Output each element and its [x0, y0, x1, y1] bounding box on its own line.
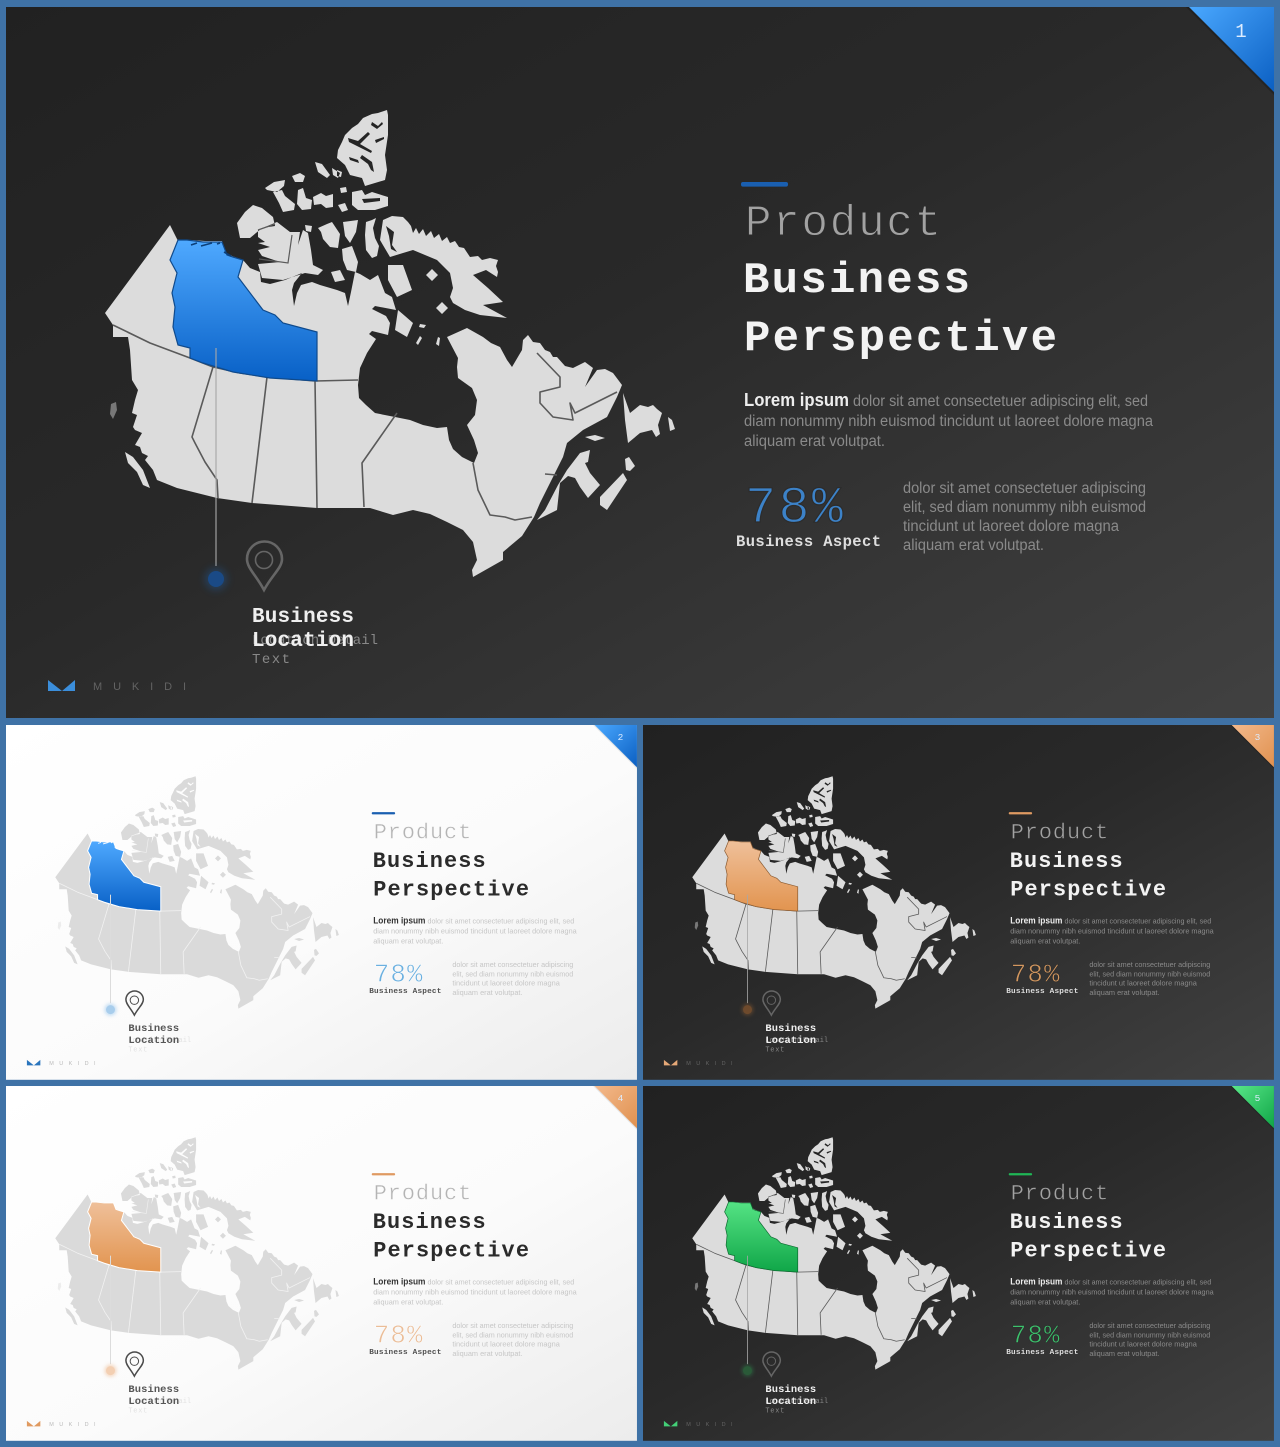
corner ribbon with number 4	[593, 1086, 637, 1130]
pin label: location detail text: Business	[252, 606, 354, 629]
stat description: tincidunt ut laoreet dolore magna	[1089, 979, 1198, 988]
stat description	[1089, 1321, 1210, 1358]
pin label: location detail text: Text	[252, 652, 290, 668]
icon: map pin	[126, 1352, 143, 1376]
stat: 78 percent: 78%	[1011, 959, 1060, 989]
stat description: elit, sed diam nonummy nibh euismod	[1089, 1330, 1210, 1339]
map of Canada	[105, 110, 675, 577]
stat: 78 percent	[1006, 959, 1078, 996]
intro paragraph: dolor sit amet consectetuer adipiscing elit, sed	[853, 393, 1148, 410]
intro paragraph: aliquam erat volutpat.	[373, 1297, 443, 1306]
heading: Business	[1010, 1210, 1123, 1235]
stat: 78 percent: Business Aspect	[1006, 1349, 1078, 1357]
stat description: dolor sit amet consectetuer adipiscing	[452, 960, 573, 969]
corner ribbon with number 5	[1230, 1086, 1274, 1130]
logo	[664, 1060, 733, 1067]
accent bar	[1009, 812, 1032, 814]
heading	[373, 1181, 529, 1264]
highlighted region: Northwest Territories	[170, 240, 317, 381]
pin label: location detail text: Location	[765, 1035, 816, 1047]
stat: 78 percent: Business Aspect	[369, 1349, 441, 1357]
intro paragraph: aliquam erat volutpat.	[373, 936, 443, 945]
stat description: tincidunt ut laoreet dolore magna	[452, 979, 561, 988]
highlighted region: Northwest Territories	[88, 1202, 161, 1272]
stat description: dolor sit amet consectetuer adipiscing	[452, 1321, 573, 1330]
heading: Business	[373, 1210, 486, 1235]
logo: MUKIDI	[49, 1422, 96, 1428]
pin label: location detail text: Text	[128, 1407, 147, 1415]
intro paragraph: diam nonummy nibh euismod tincidunt ut laoreet dolore magna	[373, 1287, 577, 1296]
heading: Product	[745, 199, 941, 249]
heading: Perspective	[1010, 1239, 1166, 1264]
corner ribbon with number 4: 4	[618, 1093, 624, 1104]
stat description: aliquam erat volutpat.	[452, 988, 523, 997]
map of Canada	[55, 776, 339, 1009]
heading: Business	[373, 849, 486, 874]
stat: 78 percent: 78%	[374, 959, 423, 989]
corner ribbon with number 1: 1	[1235, 21, 1247, 43]
accent bar	[1009, 1173, 1032, 1175]
heading	[373, 820, 529, 903]
heading	[743, 199, 1057, 364]
slide background	[643, 725, 1274, 1080]
intro paragraph	[744, 390, 1153, 450]
intro paragraph	[1010, 916, 1214, 945]
accent bar	[372, 812, 395, 814]
stat description: elit, sed diam nonummy nibh euismod	[452, 1330, 573, 1339]
pin label: location detail text: Location	[128, 1035, 179, 1047]
intro paragraph: Lorem ipsum	[1010, 916, 1063, 926]
stat: 78 percent	[369, 959, 441, 996]
intro paragraph: Lorem ipsum	[373, 916, 426, 926]
map of Canada	[692, 1137, 976, 1370]
highlighted region: Northwest Territories	[725, 1202, 798, 1272]
location dot	[105, 1365, 116, 1377]
corner ribbon with number 3: 3	[1255, 732, 1261, 743]
pin label: location detail text: Location Detail	[128, 1398, 191, 1406]
pin label: location detail text	[765, 1023, 828, 1054]
stat description: tincidunt ut laoreet dolore magna	[452, 1340, 561, 1349]
intro paragraph: dolor sit amet consectetuer adipiscing elit, sed	[427, 917, 574, 926]
location dot	[105, 1004, 116, 1016]
intro paragraph: diam nonummy nibh euismod tincidunt ut laoreet dolore magna	[1010, 1287, 1214, 1296]
pin label: location detail text	[252, 606, 378, 668]
pin label: location detail text: Location Detail	[128, 1037, 191, 1045]
heading: Product	[374, 1181, 471, 1206]
stat: 78 percent: 78%	[1011, 1320, 1060, 1350]
pin label: location detail text	[128, 1023, 191, 1054]
location dot	[205, 568, 227, 590]
intro paragraph: Lorem ipsum	[373, 1277, 426, 1287]
panel: slide 1 dark blue	[6, 7, 1274, 718]
pin label: location detail text: Location	[252, 630, 354, 653]
location dot	[742, 1365, 753, 1377]
stat description: elit, sed diam nonummy nibh euismod	[1089, 969, 1210, 978]
slide background	[643, 1086, 1274, 1441]
heading: Perspective	[744, 314, 1057, 364]
pin label: location detail text: Business	[128, 1023, 179, 1035]
stat description: dolor sit amet consectetuer adipiscing	[903, 480, 1146, 497]
stat: 78 percent: Business Aspect	[736, 533, 881, 551]
panel: slide 2 light blue	[6, 725, 637, 1080]
corner ribbon with number 2	[593, 725, 637, 769]
pin connector line	[109, 1256, 111, 1364]
stat description: aliquam erat volutpat.	[452, 1349, 523, 1358]
intro paragraph: Lorem ipsum	[1010, 1277, 1063, 1287]
corner ribbon with number 3	[1230, 725, 1274, 769]
icon: map pin	[763, 991, 780, 1015]
highlighted region: Northwest Territories	[725, 841, 798, 911]
stat description: tincidunt ut laoreet dolore magna	[1089, 1340, 1198, 1349]
stat: 78 percent: 78%	[745, 479, 844, 538]
logo: MUKIDI	[93, 681, 186, 693]
stat description: aliquam erat volutpat.	[1089, 988, 1160, 997]
pin label: location detail text: Business	[128, 1384, 179, 1396]
intro paragraph: diam nonummy nibh euismod tincidunt ut laoreet dolore magna	[1010, 926, 1214, 935]
stat description	[452, 1321, 573, 1358]
pin label: location detail text: Business	[765, 1384, 816, 1396]
pin label: location detail text: Text	[765, 1046, 784, 1054]
intro paragraph	[373, 916, 577, 945]
panel: slide 5 dark green	[643, 1086, 1274, 1441]
corner ribbon with number 2: 2	[618, 732, 623, 743]
logo: MUKIDI	[686, 1061, 733, 1067]
pin connector line	[746, 895, 748, 1003]
heading	[1010, 820, 1166, 903]
pin connector line	[215, 348, 217, 566]
stat: 78 percent	[736, 479, 881, 551]
stat description	[903, 480, 1146, 554]
stat: 78 percent	[1006, 1320, 1078, 1357]
heading: Perspective	[373, 878, 529, 903]
pin label: location detail text: Location	[128, 1396, 179, 1408]
icon: map pin	[126, 991, 143, 1015]
intro paragraph	[1010, 1277, 1214, 1306]
pin label: location detail text	[765, 1384, 828, 1415]
stat: 78 percent: Business Aspect	[1006, 988, 1078, 996]
heading: Perspective	[1010, 878, 1166, 903]
pin label: location detail text: Location	[765, 1396, 816, 1408]
logo: MUKIDI	[49, 1061, 96, 1067]
accent bar	[741, 182, 788, 187]
pin label: location detail text: Location Detail	[765, 1398, 828, 1406]
intro paragraph: aliquam erat volutpat.	[744, 433, 885, 450]
stat description: dolor sit amet consectetuer adipiscing	[1089, 960, 1210, 969]
pin label: location detail text: Location Detail	[765, 1037, 828, 1045]
intro paragraph: diam nonummy nibh euismod tincidunt ut laoreet dolore magna	[373, 926, 577, 935]
stat description: elit, sed diam nonummy nibh euismod	[452, 969, 573, 978]
stat description: elit, sed diam nonummy nibh euismod	[903, 499, 1146, 516]
pin label: location detail text: Business	[765, 1023, 816, 1035]
logo	[48, 680, 186, 693]
panel: slide 3 dark orange	[643, 725, 1274, 1080]
pin connector line	[109, 895, 111, 1003]
pin label: location detail text: Text	[765, 1407, 784, 1415]
pin label: location detail text	[128, 1384, 191, 1415]
panel: slide 4 light orange	[6, 1086, 637, 1441]
heading: Product	[1011, 1181, 1108, 1206]
stat: 78 percent: 78%	[374, 1320, 423, 1350]
slide background	[6, 725, 637, 1080]
stat: 78 percent: Business Aspect	[369, 988, 441, 996]
stat description: aliquam erat volutpat.	[903, 537, 1044, 554]
location dot	[742, 1004, 753, 1016]
heading: Perspective	[373, 1239, 529, 1264]
corner ribbon with number 1	[1186, 7, 1274, 95]
accent bar	[372, 1173, 395, 1175]
stat description: aliquam erat volutpat.	[1089, 1349, 1160, 1358]
heading: Business	[1010, 849, 1123, 874]
intro paragraph: dolor sit amet consectetuer adipiscing elit, sed	[1064, 917, 1211, 926]
intro paragraph	[373, 1277, 577, 1306]
heading: Business	[743, 256, 970, 306]
icon: map pin	[247, 542, 282, 590]
stat: 78 percent	[369, 1320, 441, 1357]
intro paragraph: aliquam erat volutpat.	[1010, 936, 1080, 945]
icon: map pin	[763, 1352, 780, 1376]
logo	[27, 1421, 96, 1428]
logo	[664, 1421, 733, 1428]
logo: MUKIDI	[686, 1422, 733, 1428]
logo	[27, 1060, 96, 1067]
slide background	[6, 1086, 637, 1441]
stat description: tincidunt ut laoreet dolore magna	[903, 518, 1119, 535]
heading: Product	[374, 820, 471, 845]
map of Canada	[692, 776, 976, 1009]
pin label: location detail text: Location Detail	[252, 633, 378, 649]
map of Canada	[55, 1137, 339, 1370]
heading: Product	[1011, 820, 1108, 845]
stat description	[1089, 960, 1210, 997]
intro paragraph: diam nonummy nibh euismod tincidunt ut laoreet dolore magna	[744, 413, 1153, 430]
intro paragraph: dolor sit amet consectetuer adipiscing elit, sed	[1064, 1278, 1211, 1287]
slide background	[6, 7, 1274, 718]
stat description	[452, 960, 573, 997]
intro paragraph: dolor sit amet consectetuer adipiscing elit, sed	[427, 1278, 574, 1287]
heading	[1010, 1181, 1166, 1264]
stat description: dolor sit amet consectetuer adipiscing	[1089, 1321, 1210, 1330]
pin label: location detail text: Text	[128, 1046, 147, 1054]
highlighted region: Northwest Territories	[88, 841, 161, 911]
intro paragraph: Lorem ipsum	[744, 390, 849, 410]
pin connector line	[746, 1256, 748, 1364]
intro paragraph: aliquam erat volutpat.	[1010, 1297, 1080, 1306]
corner ribbon with number 5: 5	[1255, 1093, 1261, 1104]
